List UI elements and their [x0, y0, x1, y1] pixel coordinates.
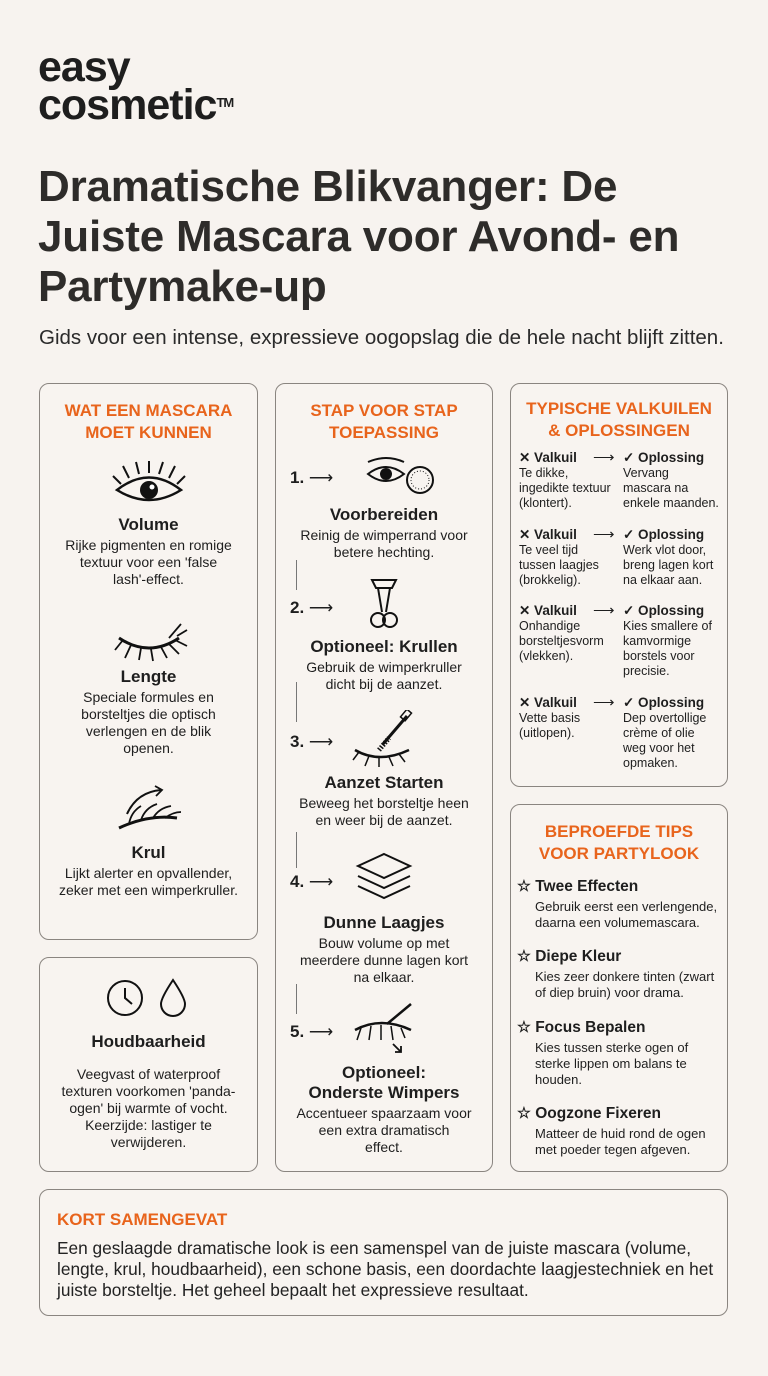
tip 2: Kies zeer donkere tinten (zwart	[535, 969, 714, 984]
step 5: een extra dramatisch	[319, 1122, 449, 1138]
row 4: crème of olie	[623, 726, 695, 740]
panel: tips	[510, 804, 728, 1172]
row 1: Vervang	[623, 466, 669, 480]
row 3: Onhandige	[519, 619, 580, 633]
row 2: ✕ Valkuil	[519, 527, 577, 542]
item: lengte: borsteltjes die optisch	[81, 706, 216, 722]
step 5: Onderste Wimpers	[308, 1083, 460, 1102]
item: krul: zeker met een wimperkruller.	[59, 882, 238, 898]
item: krul: Lijkt alerter en opvallender,	[65, 865, 232, 881]
row 3: ⟶	[593, 602, 615, 619]
heading: TYPISCHE VALKUILEN	[526, 399, 712, 418]
item: lengte: verlengen en de blik	[86, 723, 211, 739]
tip 3	[517, 1019, 688, 1087]
step 3: Aanzet Starten	[324, 773, 444, 792]
logo: cosmeticTM	[38, 81, 233, 129]
row 3: ✓ Oplossing	[623, 603, 704, 618]
heading: MOET KUNNEN	[85, 423, 212, 442]
row 3: borstels voor	[623, 649, 695, 663]
step 2: dicht bij de aanzet.	[326, 676, 442, 692]
row 2: tussen laagjes	[519, 558, 599, 572]
row 1: (klontert).	[519, 496, 572, 510]
row 3: ✕ Valkuil	[519, 603, 577, 618]
logo	[38, 43, 234, 129]
step 3: Beweeg het borsteltje heen	[299, 795, 469, 811]
step 5: 5. ⟶	[290, 1022, 333, 1041]
step 3	[290, 682, 469, 828]
title: Juiste Mascara voor Avond- en	[38, 212, 679, 261]
row 4: ⟶	[593, 694, 615, 711]
row 1	[519, 449, 719, 510]
row 2: na elkaar aan.	[623, 573, 702, 587]
step 4: Bouw volume op met	[319, 935, 449, 951]
tip 1: ☆ Twee Effecten	[517, 878, 638, 895]
heading: KORT SAMENGEVAT	[57, 1210, 227, 1229]
row 2: breng lagen kort	[623, 558, 713, 572]
summary text: Een geslaagde dramatische look is een samenspel van de juiste mascara (volume, lengte, krul, houdbaarheid), een schone basis, een doordachte laagjestechniek en het juiste borsteltje. Het geheel bepaalt het expressieve resultaat.	[57, 1238, 713, 1300]
row 4: Dep overtollige	[623, 711, 706, 725]
row 1: ✓ Oplossing	[623, 450, 704, 465]
heading	[539, 822, 699, 863]
step 2: Gebruik de wimperkruller	[306, 659, 462, 675]
text: texturen voorkomen 'panda-	[62, 1083, 235, 1099]
item: volume: Volume	[118, 515, 179, 534]
heading: TOEPASSING	[329, 423, 439, 442]
tip 3: houden.	[535, 1072, 582, 1087]
tip 2: of diep bruin) voor drama.	[535, 985, 684, 1000]
heading	[526, 399, 712, 440]
title	[38, 162, 679, 311]
tip 1	[517, 878, 717, 930]
heading: & OPLOSSINGEN	[548, 421, 690, 440]
row 2: Werk vlot door,	[623, 543, 706, 557]
step 1: Voorbereiden	[330, 505, 438, 524]
tip 1: daarna een volumemascara.	[535, 915, 700, 930]
row 3: borsteltjesvorm	[519, 634, 604, 648]
row 3: (vlekken).	[519, 649, 573, 663]
panel: valkuilen	[510, 383, 728, 787]
step 2: Optioneel: Krullen	[310, 637, 458, 656]
row 4: ✕ Valkuil	[519, 695, 577, 710]
icon: curl arrow	[118, 785, 181, 830]
item: lengte	[81, 623, 216, 756]
title: Dramatische Blikvanger: De	[38, 162, 617, 211]
row 1: ingedikte textuur	[519, 481, 611, 495]
step 4	[290, 832, 468, 985]
step 3: en weer bij de aanzet.	[316, 812, 452, 828]
heading: Houdbaarheid	[91, 1032, 206, 1051]
item: lengte: Lengte	[121, 667, 176, 686]
step 4: meerdere dunne lagen kort	[300, 952, 468, 968]
tip 2: ☆ Diepe Kleur	[517, 948, 621, 965]
tip 3: sterke lippen om balans te	[535, 1056, 687, 1071]
icon: eye	[112, 461, 186, 502]
row 4: (uitlopen).	[519, 726, 575, 740]
panel: houdbaarheid	[39, 957, 258, 1172]
panel: wat een mascara moet kunnen	[39, 383, 258, 940]
row 2: ⟶	[593, 526, 615, 543]
heading: STAP VOOR STAP	[310, 401, 458, 420]
row 4: Vette basis	[519, 711, 580, 725]
row 2: Te veel tijd	[519, 543, 578, 557]
step 4: Dunne Laagjes	[324, 913, 444, 932]
item: lengte: Speciale formules en	[83, 689, 214, 705]
text	[62, 1066, 235, 1150]
step 5: effect.	[365, 1139, 403, 1155]
panel: kort samengevat	[39, 1189, 728, 1316]
text: verwijderen.	[111, 1134, 186, 1150]
row 2: (brokkelig).	[519, 573, 581, 587]
row 3: Kies smallere of	[623, 619, 712, 633]
step 5: Optioneel:	[342, 1063, 426, 1082]
tip 3: Kies tussen sterke ogen of	[535, 1040, 688, 1055]
row 3	[519, 602, 712, 678]
step 2	[290, 560, 462, 692]
item: volume: Rijke pigmenten en romige	[65, 537, 232, 553]
step 5	[290, 984, 472, 1155]
tip 4: Matteer de huid rond de ogen	[535, 1126, 706, 1141]
panel: stap voor stap	[275, 383, 493, 1172]
logo: easy	[38, 43, 130, 91]
item: volume: textuur voor een 'false	[80, 554, 217, 570]
text: Veegvast of waterproof	[77, 1066, 220, 1082]
row 3: kamvormige	[623, 634, 691, 648]
tip 4: ☆ Oogzone Fixeren	[517, 1105, 661, 1122]
subtitle: Gids voor een intense, expressieve oogopslag die de hele nacht blijft zitten.	[39, 326, 724, 349]
heading: VOOR PARTYLOOK	[539, 844, 699, 863]
step 5: Accentueer spaarzaam voor	[296, 1105, 472, 1121]
row 1: enkele maanden.	[623, 496, 719, 510]
item: krul	[59, 785, 238, 898]
item: volume: lash'-effect.	[113, 571, 184, 587]
text: ogen' bij warmte of vocht.	[69, 1100, 228, 1116]
row 1: ✕ Valkuil	[519, 450, 577, 465]
item: krul: Krul	[132, 843, 166, 862]
row 2	[519, 526, 714, 587]
tip 1: Gebruik eerst een verlengende,	[535, 899, 717, 914]
step 2: 2. ⟶	[290, 598, 333, 617]
text: Keerzijde: lastiger te	[85, 1117, 212, 1133]
row 1: Te dikke,	[519, 466, 568, 480]
row 4: ✓ Oplossing	[623, 695, 704, 710]
row 1: ⟶	[593, 449, 615, 466]
step 1: betere hechting.	[334, 544, 434, 560]
heading: WAT EEN MASCARA	[65, 401, 232, 420]
step 4: 4. ⟶	[290, 872, 333, 891]
tip 2	[517, 948, 714, 1000]
item: lengte: openen.	[123, 740, 174, 756]
step 1	[290, 457, 468, 560]
row 4	[519, 694, 706, 770]
row 4: weg voor het	[623, 741, 695, 755]
heading	[310, 401, 458, 442]
row 3: precisie.	[623, 664, 670, 678]
item: volume	[65, 461, 232, 587]
tip 3: ☆ Focus Bepalen	[517, 1019, 645, 1036]
step 4: na elkaar.	[354, 969, 414, 985]
row 2: ✓ Oplossing	[623, 527, 704, 542]
step 3: 3. ⟶	[290, 732, 333, 751]
tip 4: met poeder tegen afgeven.	[535, 1142, 690, 1157]
row 4: opmaken.	[623, 756, 678, 770]
heading	[64, 401, 232, 442]
row 1: mascara na	[623, 481, 688, 495]
tip 4	[517, 1105, 706, 1157]
icon: long lashes	[114, 623, 188, 662]
step 1: 1. ⟶	[290, 468, 333, 487]
heading: BEPROEFDE TIPS	[545, 822, 693, 841]
step 1: Reinig de wimperrand voor	[300, 527, 468, 543]
title: Partymake-up	[38, 262, 327, 311]
icons: clock and drop	[107, 978, 186, 1017]
